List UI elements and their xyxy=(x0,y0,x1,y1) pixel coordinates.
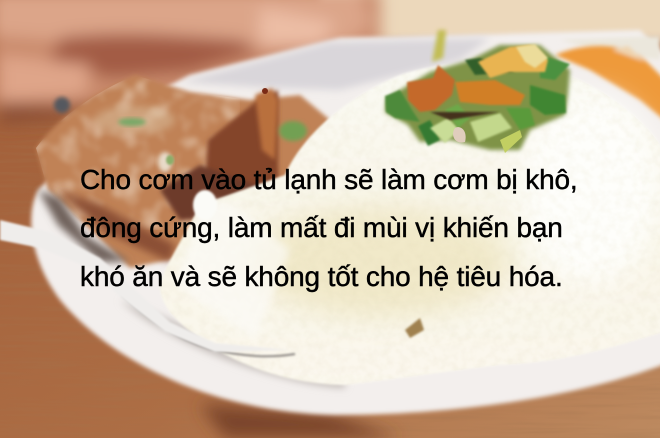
orange carrot garnish xyxy=(555,46,660,125)
caption line 2: đông cứng, làm mất đi mùi vị khiến bạn xyxy=(80,212,563,243)
hand xyxy=(0,0,380,125)
grilled pork chop xyxy=(30,70,330,268)
caption line 1: Cho cơm vào tủ lạnh sẽ làm cơm bị khô, xyxy=(80,164,578,195)
caption line 3: khó ăn và sẽ không tốt cho hệ tiêu hóa. xyxy=(80,261,563,292)
herb and crispy pork topping xyxy=(385,44,570,153)
spoon xyxy=(0,220,295,356)
mound of rice xyxy=(150,50,660,395)
